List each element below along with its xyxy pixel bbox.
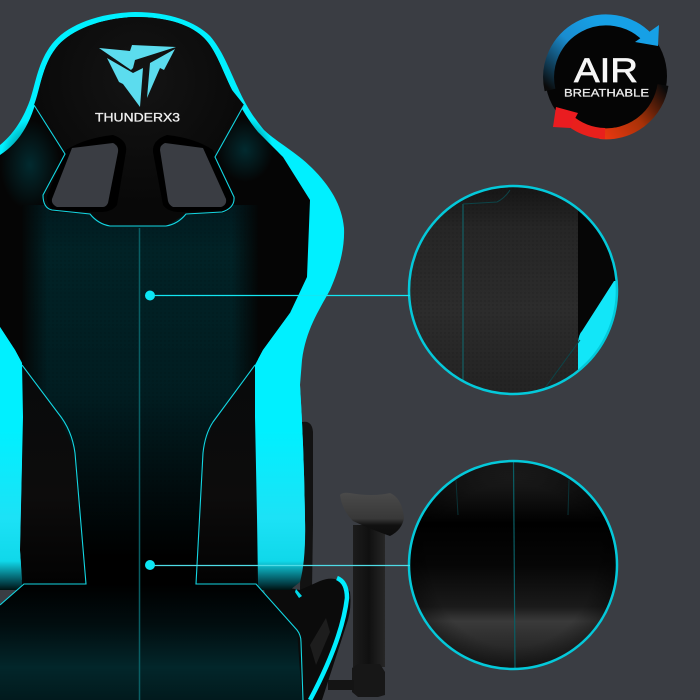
center panel left fade <box>22 205 48 585</box>
icon: blue arrow <box>549 20 659 90</box>
AIR heading: AIR <box>574 52 638 90</box>
right headrest opening frame <box>153 135 233 212</box>
logo lower left blade <box>107 58 143 107</box>
logo right blade <box>147 49 175 98</box>
chair black body <box>0 17 310 584</box>
right faint seam <box>568 480 569 515</box>
seat detail fill <box>409 461 617 669</box>
left bolster <box>0 327 23 590</box>
left shoulder glow <box>0 120 60 210</box>
right bolster <box>255 313 310 590</box>
headrest <box>34 17 244 226</box>
armrest column <box>353 525 385 667</box>
callout dot <box>145 290 155 300</box>
callout line <box>150 564 410 566</box>
right shoulder glow <box>217 118 273 182</box>
small cyan mark <box>295 589 302 598</box>
center seam <box>514 461 515 669</box>
dark side panel <box>578 210 616 341</box>
right side panel <box>196 365 257 584</box>
left headrest opening frame <box>47 135 126 212</box>
icon: red arrow <box>553 85 663 134</box>
circle ring <box>409 461 617 669</box>
cyan bolster wedge <box>578 281 616 370</box>
armrest bolt <box>328 680 354 690</box>
armrest pad <box>340 493 404 536</box>
center back panel <box>22 205 258 585</box>
left back stitch <box>0 365 86 605</box>
chair backrest rear side <box>300 422 313 590</box>
right headrest opening <box>160 143 226 207</box>
cyan seat stripe <box>310 578 347 700</box>
top seam <box>463 190 510 204</box>
armrest base <box>352 664 385 697</box>
left faint seam <box>456 480 458 515</box>
seat cushion <box>0 584 302 700</box>
red arrowhead <box>553 107 578 128</box>
seat side panel <box>262 579 350 700</box>
logo wordmark: THUNDERX3 <box>95 110 180 124</box>
zoom circle 1: breathable mesh upper <box>409 186 625 394</box>
blue arrowhead <box>635 25 659 46</box>
callout lower <box>145 560 410 570</box>
armrest <box>328 493 404 697</box>
logo emblem <box>99 45 176 107</box>
mesh detail fill <box>409 186 625 394</box>
red arc tail <box>568 119 605 134</box>
right back stitch <box>196 365 303 700</box>
diagonal seam <box>545 340 580 388</box>
center seam <box>138 228 140 700</box>
left side panel <box>20 365 86 584</box>
blue arc <box>549 20 648 90</box>
callout upper <box>145 290 410 300</box>
vertical seam <box>462 204 464 380</box>
cyan stitching lines <box>0 105 303 700</box>
headrest outline stitch <box>34 105 244 226</box>
badge disc <box>545 15 667 137</box>
AIR breathable badge <box>545 15 667 137</box>
chair cyan piping and bolsters <box>0 12 344 590</box>
zoom circle 2: breathable mesh lower <box>409 461 617 669</box>
red arc <box>600 85 663 134</box>
circle ring <box>409 186 617 394</box>
center panel right fade <box>232 205 258 585</box>
BREATHABLE label: BREATHABLE <box>564 88 649 100</box>
seat side with mesh and cyan stripe <box>262 578 350 700</box>
left headrest opening <box>52 143 118 207</box>
center panel mesh texture <box>22 205 258 585</box>
headrest black area <box>34 17 244 226</box>
callout line <box>150 294 410 296</box>
seat side mesh <box>310 618 330 665</box>
callout dot <box>145 560 155 570</box>
logo top wing <box>99 45 176 70</box>
